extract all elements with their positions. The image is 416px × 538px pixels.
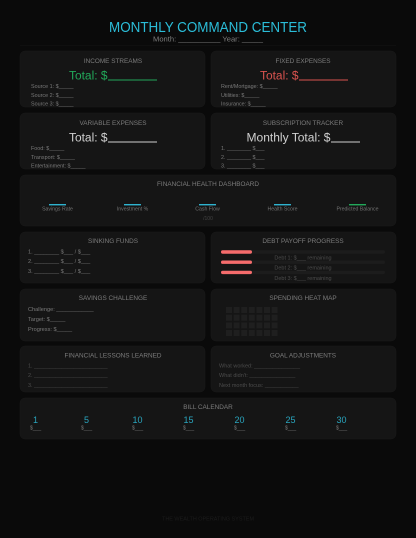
debt 2 bar: Debt 2: $___ remaining xyxy=(274,266,332,272)
goal lines xyxy=(219,364,301,389)
heading: fixed expenses: FIXED EXPENSES xyxy=(275,58,331,65)
bill day 30 xyxy=(336,415,347,432)
fixed expense lines: Utilities: $_____ xyxy=(221,93,260,99)
panel: variable expenses xyxy=(20,113,205,170)
heading: spending heat map: SPENDING HEAT MAP xyxy=(269,295,337,302)
bill day 1 xyxy=(30,415,41,432)
bill day 5: 5 xyxy=(84,415,89,425)
heading: variable expenses: VARIABLE EXPENSES xyxy=(79,120,147,127)
panel: goal adjustments xyxy=(211,346,396,392)
variable expense lines: Entertainment: $_____ xyxy=(31,164,87,170)
variable total: Total: $ xyxy=(69,132,108,144)
title: MONTHLY COMMAND CENTER xyxy=(109,20,307,36)
debt 3 bar xyxy=(221,271,385,282)
fixed expense lines: Insurance: $_____ xyxy=(221,102,267,108)
panel: spending heat map xyxy=(211,289,396,341)
bill day 30: 30 xyxy=(336,415,347,425)
panel: savings challenge xyxy=(20,289,205,341)
subscription lines xyxy=(221,146,265,170)
sinking fund lines: 1. ________ $___ / $___ xyxy=(28,249,91,255)
metric: cash flow: Cash Flow xyxy=(195,206,220,212)
bill day 25 xyxy=(285,415,296,432)
heading: financial lessons learned: FINANCIAL LESSONS LEARNED xyxy=(64,352,162,360)
sinking fund lines: 2. ________ $___ / $___ xyxy=(28,259,91,265)
heading: debt payoff progress: DEBT PAYOFF PROGRESS xyxy=(262,238,344,245)
bill day 25: 25 xyxy=(285,415,296,425)
lesson lines: 1. ________________________ xyxy=(28,364,108,370)
bill day 10: 10 xyxy=(132,415,143,425)
bill day 25: $___ xyxy=(285,426,296,432)
bill day 5: $___ xyxy=(81,426,92,432)
metric: cash flow xyxy=(195,204,220,212)
lesson lines xyxy=(28,364,108,389)
subscription lines: 2. ________ $___ xyxy=(221,155,265,161)
lesson lines: 3. ________________________ xyxy=(28,383,108,389)
panel: debt payoff progress xyxy=(211,232,396,283)
heading: income streams: INCOME STREAMS xyxy=(84,58,142,65)
fixed total: Total: $ xyxy=(260,70,299,82)
heading: goal adjustments: GOAL ADJUSTMENTS xyxy=(270,352,336,360)
challenge lines: Target: $_____ xyxy=(28,317,66,323)
bill day 15: 15 xyxy=(183,415,194,425)
goal lines: What worked: _______________ xyxy=(219,364,301,370)
variable expense lines: Transport: $_____ xyxy=(31,155,76,161)
challenge lines xyxy=(28,307,95,333)
variable expense lines xyxy=(31,146,87,170)
variable total xyxy=(69,132,157,144)
fixed total xyxy=(260,70,348,82)
debt 2 bar xyxy=(221,260,385,272)
bill day 10: $___ xyxy=(132,426,143,432)
challenge lines: Challenge: ____________ xyxy=(28,307,95,313)
challenge lines: Progress: $_____ xyxy=(28,327,73,333)
score scale: /100 xyxy=(203,216,213,222)
fixed expense lines: Rent/Mortgage: $_____ xyxy=(221,84,279,90)
heading: sinking funds: SINKING FUNDS xyxy=(88,238,138,245)
bill day 1: 1 xyxy=(33,415,38,425)
heading: subscription tracker: SUBSCRIPTION TRACKER xyxy=(263,120,343,127)
bill day 20: 20 xyxy=(234,415,245,425)
debt 1 bar: Debt 1: $___ remaining xyxy=(274,256,332,262)
footer: THE WEALTH OPERATING SYSTEM xyxy=(162,516,255,522)
panel: sinking funds xyxy=(20,232,205,283)
bill day 30: $___ xyxy=(336,426,347,432)
heading: financial health dashboard: FINANCIAL HEALTH DASHBOARD xyxy=(157,181,259,188)
panel: financial health dashboard xyxy=(20,175,396,226)
subscription lines: 1. ________ $___ xyxy=(221,146,265,152)
heading: bill calendar: BILL CALENDAR xyxy=(183,404,233,411)
subscription total: Monthly Total: $ xyxy=(246,132,331,144)
bill day 15: $___ xyxy=(183,426,194,432)
heading: savings challenge: SAVINGS CHALLENGE xyxy=(79,295,147,302)
goal lines: Next month focus: ___________ xyxy=(219,383,299,389)
panel: fixed expenses xyxy=(211,51,396,108)
income total: Total: $ xyxy=(69,70,108,82)
metric: savings rate: Savings Rate xyxy=(42,206,73,212)
goal lines: What didn't: _______________ xyxy=(219,373,296,379)
metric: investment xyxy=(117,204,149,212)
bill day 1: $___ xyxy=(30,426,41,432)
bill day 5 xyxy=(81,415,92,432)
fixed expense lines xyxy=(221,84,279,108)
income sources: Source 2: $_____ xyxy=(31,93,75,99)
heat map grid xyxy=(226,307,278,336)
metric: investment: Investment % xyxy=(117,206,149,212)
variable expense lines: Food: $_____ xyxy=(31,146,65,152)
income total xyxy=(69,70,157,82)
bill day 15 xyxy=(183,415,194,432)
month and year fields: Month: __________ Year: _____ xyxy=(153,35,264,44)
panel: subscription tracker xyxy=(211,113,396,170)
bill day 20 xyxy=(234,415,245,432)
lesson lines: 2. ________________________ xyxy=(28,373,108,379)
metric: health score: Health Score xyxy=(268,206,298,212)
income sources xyxy=(31,84,75,108)
bill day 10 xyxy=(132,415,143,432)
panel: financial lessons learned xyxy=(20,346,205,392)
panel: income streams xyxy=(20,51,205,108)
subscription lines: 3. ________ $___ xyxy=(221,164,265,170)
debt 3 bar: Debt 3: $___ remaining xyxy=(274,276,332,282)
income sources: Source 3: $_____ xyxy=(31,102,75,108)
panel: bill calendar xyxy=(20,398,396,439)
sinking fund lines: 3. ________ $___ / $___ xyxy=(28,269,91,275)
income sources: Source 1: $_____ xyxy=(31,84,75,90)
sinking fund lines xyxy=(28,249,91,275)
bill day 20: $___ xyxy=(234,426,245,432)
metric: predicted balance: Predicted Balance xyxy=(336,206,379,212)
debt 1 bar xyxy=(221,250,385,262)
